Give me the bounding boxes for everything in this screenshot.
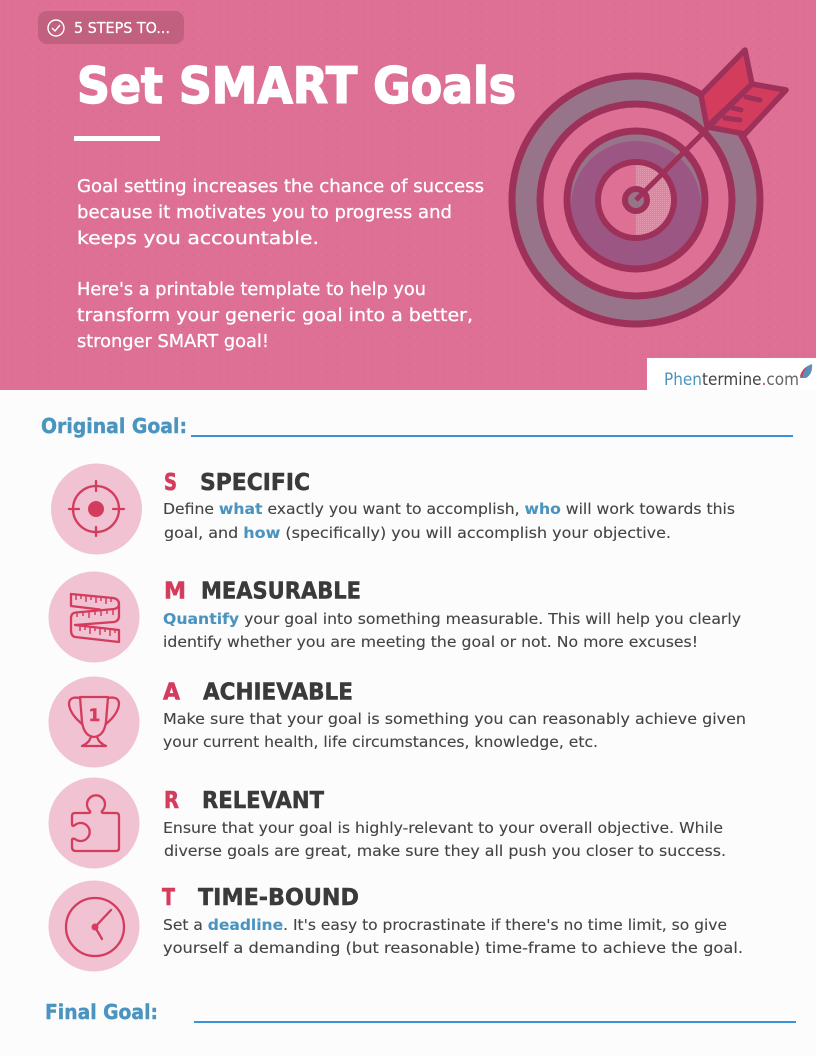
original goal field: Original Goal: xyxy=(41,414,187,438)
text: specific xyxy=(163,500,735,542)
heading: specific: S xyxy=(164,470,177,496)
step: achievable xyxy=(48,676,746,768)
text: time-bound: Set a deadline. It's easy to procrastinate if there's no time limit, so give xyxy=(163,916,727,934)
icon: puzzle piece xyxy=(48,778,140,868)
text: time-bound xyxy=(163,916,743,957)
text: specific: Define what exactly you want to accomplish, who will work towards this xyxy=(163,500,735,518)
icon: clock xyxy=(48,880,140,972)
template paragraph xyxy=(77,279,473,352)
text: achievable: your current health, life circumstances, knowledge, etc. xyxy=(163,733,598,751)
text: measurable: Quantify your goal into something measurable. This will help you clearly xyxy=(163,610,741,628)
text: relevant xyxy=(163,819,726,860)
text: relevant: diverse goals are great, make sure they all push you closer to success. xyxy=(164,842,726,860)
text: measurable: identify whether you are meeting the goal or not. No more excuses! xyxy=(163,633,698,651)
icon: target with arrow xyxy=(512,50,786,324)
heading: measurable: MEASURABLE xyxy=(201,578,361,604)
template paragraph: stronger SMART goal! xyxy=(77,331,269,352)
template paragraph: transform your generic goal into a better, xyxy=(77,305,473,326)
step: measurable xyxy=(48,572,741,662)
step: specific xyxy=(51,464,735,554)
title underline xyxy=(74,136,160,141)
icon: measuring tape xyxy=(48,572,140,662)
text: time-bound: yourself a demanding (but reasonable) time-frame to achieve the goal. xyxy=(163,939,743,957)
text: achievable xyxy=(163,710,746,751)
logo xyxy=(647,358,816,390)
heading: relevant: R xyxy=(164,788,179,814)
header dot texture xyxy=(0,0,816,390)
intro paragraph: Goal setting increases the chance of success xyxy=(77,176,484,197)
text: measurable xyxy=(163,610,741,651)
intro paragraph xyxy=(77,176,484,249)
icon: trophy xyxy=(48,676,140,768)
heading: achievable: A xyxy=(163,680,180,706)
intro paragraph: keeps you accountable. xyxy=(77,228,319,249)
badge: 5 steps to: 5 STEPS TO... xyxy=(74,19,170,37)
step: time-bound xyxy=(48,880,743,972)
title: Set SMART Goals xyxy=(77,57,516,115)
header background xyxy=(0,0,816,390)
heading: time-bound: T xyxy=(162,885,175,911)
final goal field: Final Goal: xyxy=(45,1000,158,1024)
header panel xyxy=(0,0,816,390)
heading: achievable: ACHIEVABLE xyxy=(203,680,353,706)
intro paragraph: because it motivates you to progress and xyxy=(77,202,452,223)
text: relevant: Ensure that your goal is highly-relevant to your overall objective. While xyxy=(163,819,723,837)
heading: relevant: RELEVANT xyxy=(202,788,324,814)
icon: crosshair xyxy=(51,464,142,554)
heading: time-bound: TIME-BOUND xyxy=(198,885,359,911)
logo: Phentermine.com xyxy=(664,370,799,390)
text: achievable: Make sure that your goal is something you can reasonably achieve given xyxy=(163,710,746,728)
badge: 5 steps to xyxy=(38,11,184,44)
step: relevant xyxy=(48,778,726,868)
heading: specific: SPECIFIC xyxy=(200,470,310,496)
heading: measurable: M xyxy=(164,578,186,604)
text: specific: goal, and how (specifically) you will accomplish your objective. xyxy=(164,524,671,542)
icon: trophy: 1 xyxy=(88,706,100,726)
template paragraph: Here's a printable template to help you xyxy=(77,279,426,300)
